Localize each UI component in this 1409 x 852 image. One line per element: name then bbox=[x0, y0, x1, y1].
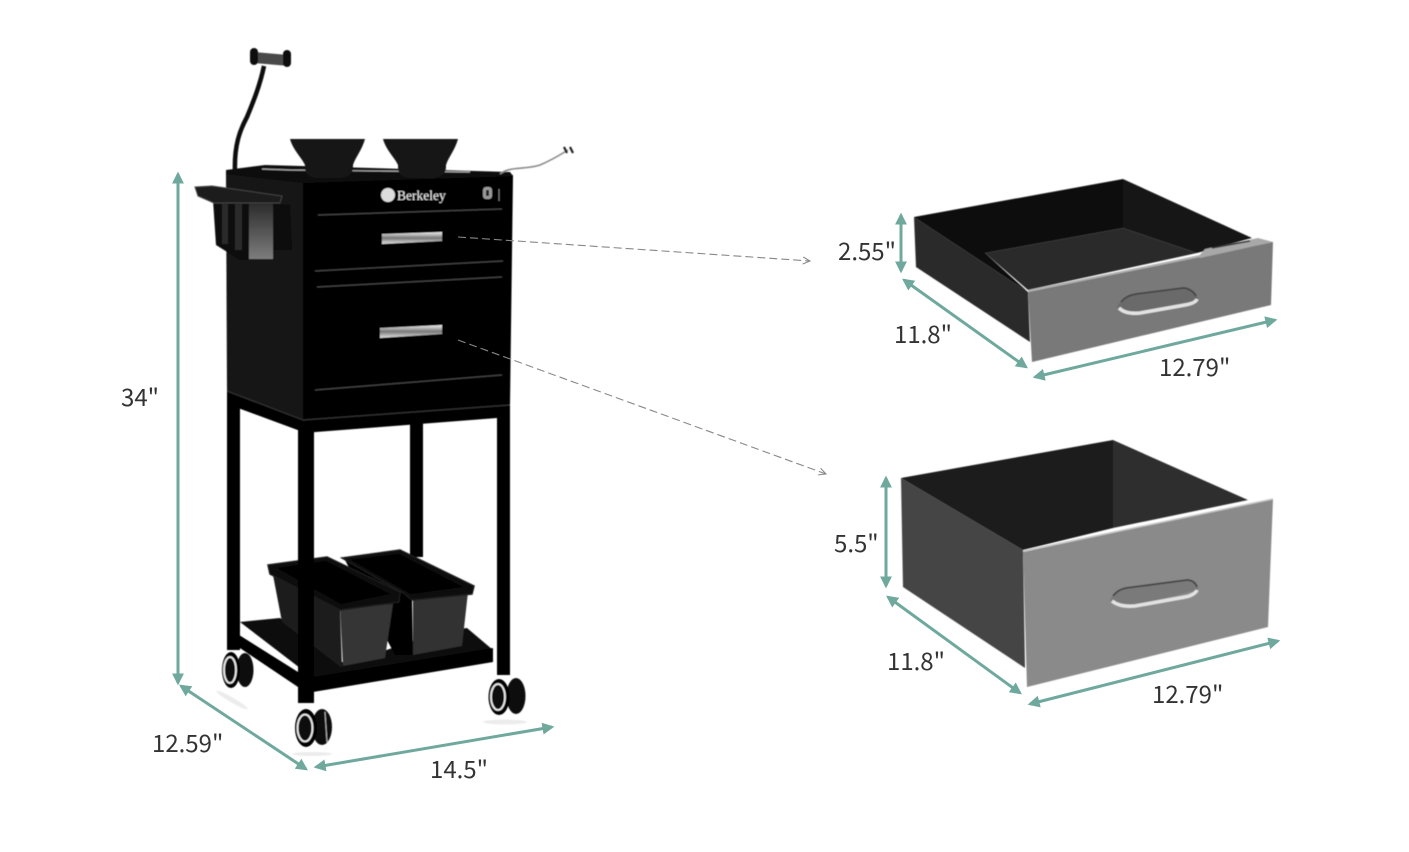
handle bbox=[1110, 580, 1198, 607]
interior right wall bbox=[1123, 179, 1252, 253]
arrow: lower drawer width bbox=[1030, 641, 1278, 704]
tool holder bbox=[195, 186, 292, 260]
upper drawer outline bbox=[315, 209, 503, 271]
front panel bbox=[1023, 499, 1273, 687]
arrow: upper drawer depth bbox=[904, 280, 1026, 367]
top tray bbox=[226, 165, 513, 183]
panel lip bbox=[1028, 238, 1273, 291]
top frame bars bbox=[227, 391, 510, 433]
right bowl bbox=[383, 139, 458, 178]
label: upper drawer width: 12.79" bbox=[1159, 348, 1230, 383]
label: cart height: 34" bbox=[121, 378, 159, 413]
left bowl bbox=[290, 139, 365, 178]
rear legs bbox=[227, 398, 423, 650]
front caster bbox=[295, 709, 332, 747]
outer left side bbox=[901, 478, 1025, 668]
cabinet front bbox=[303, 175, 513, 420]
arrow: lower drawer height bbox=[884, 478, 888, 586]
handle bbox=[1117, 288, 1198, 315]
label: upper drawer depth: 11.8" bbox=[894, 315, 952, 350]
label: lower drawer height: 5.5" bbox=[834, 524, 879, 559]
shelf frame and front legs bbox=[228, 403, 510, 703]
cabinet side bbox=[226, 172, 303, 420]
side wire bbox=[500, 150, 568, 174]
left caster bbox=[222, 652, 254, 688]
interior back wall bbox=[914, 179, 1123, 292]
arrow: cart width bbox=[316, 727, 552, 767]
arrow: upper drawer width bbox=[1035, 320, 1275, 377]
phone arm bbox=[235, 66, 264, 172]
arrow: upper drawer height bbox=[900, 215, 902, 271]
label: cart depth: 12.59" bbox=[152, 724, 223, 759]
lock bbox=[483, 187, 499, 201]
label: cart width: 14.5" bbox=[430, 750, 488, 785]
label: upper drawer height: 2.55" bbox=[838, 232, 896, 267]
label: lower drawer width: 12.79" bbox=[1152, 675, 1223, 710]
phone clamp bbox=[250, 48, 291, 67]
floor shadows bbox=[215, 689, 527, 756]
lower drawer bbox=[901, 440, 1273, 687]
arrow: cart depth bbox=[181, 686, 306, 769]
arrow: lower drawer depth bbox=[888, 597, 1020, 693]
arrow: cart height bbox=[176, 174, 180, 683]
front panel bbox=[1028, 242, 1273, 362]
shelf tray bbox=[240, 618, 493, 680]
interior back wall bbox=[901, 440, 1113, 550]
upper drawer handle bbox=[382, 232, 442, 244]
upper drawer bbox=[914, 179, 1273, 362]
interior floor bbox=[985, 228, 1197, 290]
left storage bin bbox=[268, 557, 400, 668]
outer left side bbox=[914, 217, 1030, 342]
interior right wall bbox=[1113, 440, 1248, 528]
lower drawer outline bbox=[227, 277, 510, 420]
right caster bbox=[488, 678, 526, 715]
brand logo: Berkeley bbox=[397, 188, 446, 203]
lower drawer handle bbox=[380, 325, 442, 338]
callout line: upper drawer bbox=[458, 237, 810, 261]
right storage bin bbox=[342, 550, 474, 655]
wire tips bbox=[564, 147, 573, 153]
callout line: lower drawer bbox=[458, 340, 826, 474]
trolley cart bbox=[195, 48, 573, 756]
label: lower drawer depth: 11.8" bbox=[887, 642, 945, 677]
